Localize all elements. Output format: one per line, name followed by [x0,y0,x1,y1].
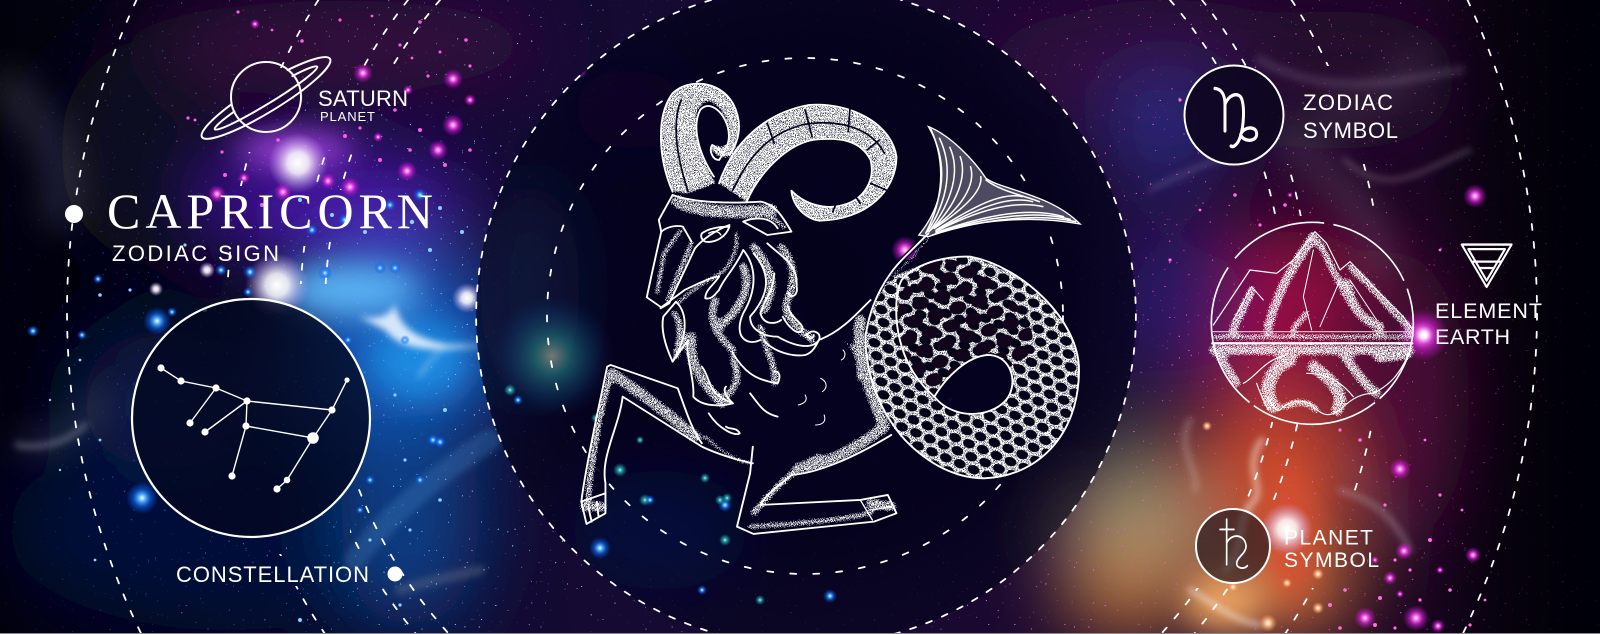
subtitle: ZODIAC SIGN [112,241,279,266]
creature dark silhouette [581,84,1080,534]
label: zodiac symbol: SYMBOL [1303,118,1398,143]
mountain stippling [1213,237,1412,410]
label: zodiac symbol: ZODIAC [1303,90,1393,115]
icon: Saturn planet [195,48,337,149]
mountain outlines and waterline [1212,232,1412,415]
creature outlines [581,84,1079,534]
central dark disc [476,0,1136,634]
label: constellation: CONSTELLATION [176,562,369,587]
label: element earth [1435,299,1542,349]
label: planet symbol [1284,526,1379,572]
small pink stars, upper left [186,10,472,207]
small blue stars, left [49,198,464,622]
constellation lines [161,368,347,489]
panel: constellation [132,299,370,537]
label: planet symbol: SYMBOL [1284,549,1379,572]
title text: CAPRICORN [107,183,433,239]
creature tail scales [866,257,1079,478]
creature dense stippling: horns and tail [661,84,1079,478]
label: zodiac symbol [1303,90,1398,143]
icon: planet symbol [1196,509,1270,583]
horn ridge marks [676,100,886,212]
creature light stippling: head, mane and body [585,202,929,527]
icon: earth element mountains [1211,222,1413,424]
label: element earth: EARTH [1435,325,1510,349]
label: Saturn planet: PLANET [320,109,375,124]
heading: Capricorn title [65,183,433,266]
label: planet symbol: PLANET [1284,526,1373,550]
small pink stars, lower right [1168,98,1486,630]
constellation stars [157,364,350,493]
illustration: Capricorn sea-goat [581,84,1080,534]
label: Saturn planet: SATURN [318,86,408,111]
icon: zodiac symbol [1184,66,1284,164]
label: Saturn planet [318,86,408,124]
mountain ring [1211,222,1413,424]
icon: earth element triangle [1462,245,1512,287]
label: element earth: ELEMENT [1435,299,1542,323]
creature tail fluke [919,127,1080,237]
heading bullet dot [65,205,83,223]
